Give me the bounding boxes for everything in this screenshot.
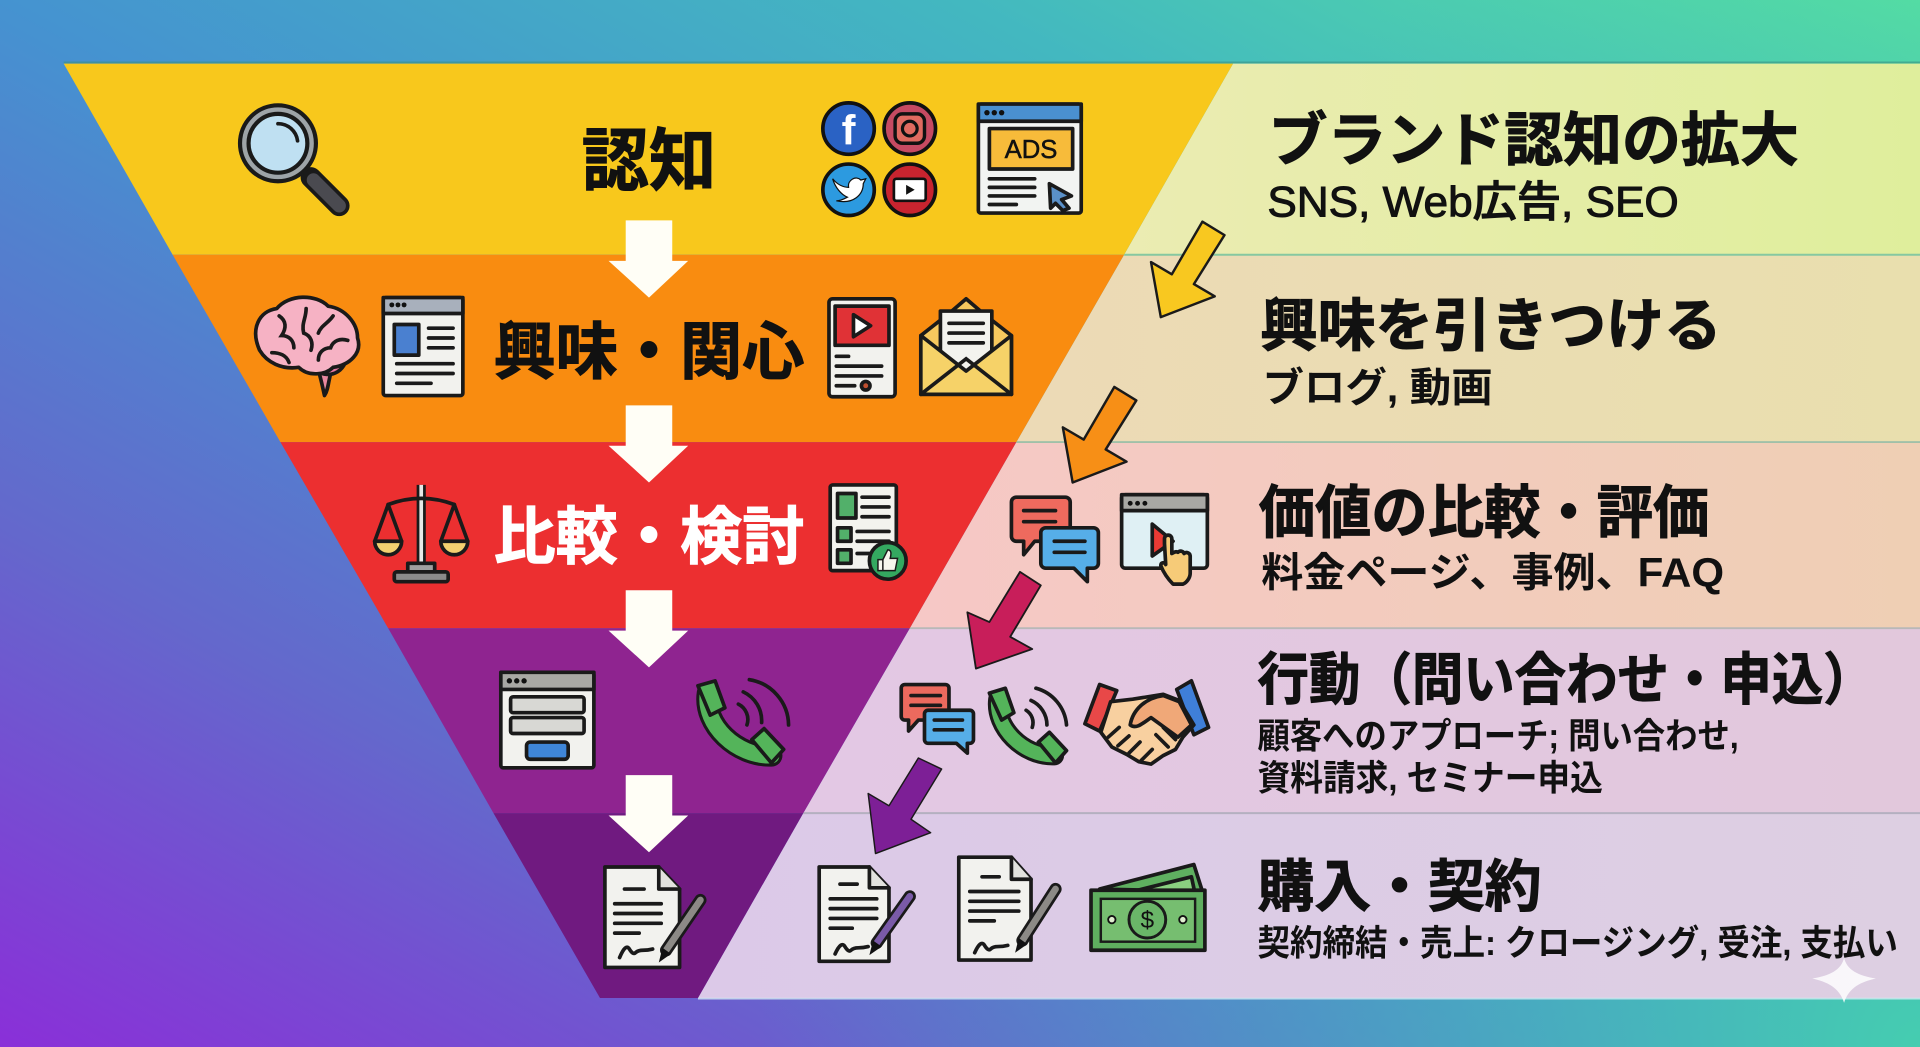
icon: magnifier [240,105,339,206]
heading block: 興味を引きつける: 興味を引きつける [1260,278,1722,362]
icon: sparkle watermark [1812,958,1876,1003]
sub text: blog and video: ブログ, 動画 [1262,365,1493,411]
arrow: orange [1063,387,1136,482]
heading block: 行動 [1258,635,1875,798]
heading block: ブランド認知の拡大: ブランド認知の拡大 [1269,92,1799,177]
icon: facebook [823,103,874,154]
icon: article window [383,298,463,396]
icon: phone (funnel) [698,680,789,763]
heading block: 購入・契約 [1258,842,1898,963]
icon: form window [501,672,594,768]
sub text: customer approach line 2: 資料請求, セミナー申込 [1258,758,1603,798]
heading block: 興味を引きつける [1260,278,1722,411]
icon: envelope [921,299,1011,394]
icon: brain [256,297,359,396]
icon: twitter [823,164,874,216]
heading: 比較・検討: 比較・検討 [493,486,804,576]
icon: ads browser window [978,104,1081,213]
heading block: ブランド認知の拡大 [1267,92,1799,227]
heading: 興味・関心: 興味・関心 [493,301,804,391]
funnel stage: interest [173,255,1124,442]
icon: banknotes: $ [1141,907,1155,934]
arrow: white funnel arrows [609,220,688,852]
icon: instagram [884,103,936,154]
heading block: 価値の比較・評価: 価値の比較・評価 [1259,466,1709,550]
icon: contract with purple pen [819,867,910,961]
icon: chat bubbles [1011,497,1098,582]
heading block: 購入・契約: 購入・契約 [1258,842,1542,923]
icon: contract with gray pen [959,857,1056,960]
icon: chat bubbles small [901,685,973,753]
funnel stage: awareness [64,64,1233,255]
sub text: pricing: 料金ページ、事例、FAQ [1261,550,1724,596]
panel: funnel [64,64,1233,998]
heading block: 価値の比較・評価 [1259,466,1724,596]
heading: 認知: 認知 [582,105,716,205]
funnel stage: action [388,628,910,813]
funnel stage: comparison [280,442,1016,628]
icon: youtube [884,164,936,216]
arrow: purple [868,758,942,854]
sub text: channels: SNS, Web広告, SEO [1267,179,1679,227]
sub text: customer approach line 1: 顧客へのアプローチ; 問い合わせ, [1258,716,1739,756]
icon: review document with thumbs-up [830,485,906,579]
funnel stage: purchase [493,813,803,998]
icon: ads browser window: ADS [1005,136,1057,164]
icon: video click window [1122,495,1207,584]
icon: balance scales [375,485,468,582]
heading block: 行動: 行動（問い合わせ・申込） [1258,635,1875,716]
icon: banknotes [1091,865,1205,950]
icon: contract (funnel) [605,867,700,967]
icon: phone [989,688,1067,763]
icon: facebook: f [842,106,856,153]
icon: video document [829,299,895,397]
arrow: crimson [967,572,1041,669]
arrow: yellow [1151,222,1224,317]
icon: handshake [1085,681,1209,764]
